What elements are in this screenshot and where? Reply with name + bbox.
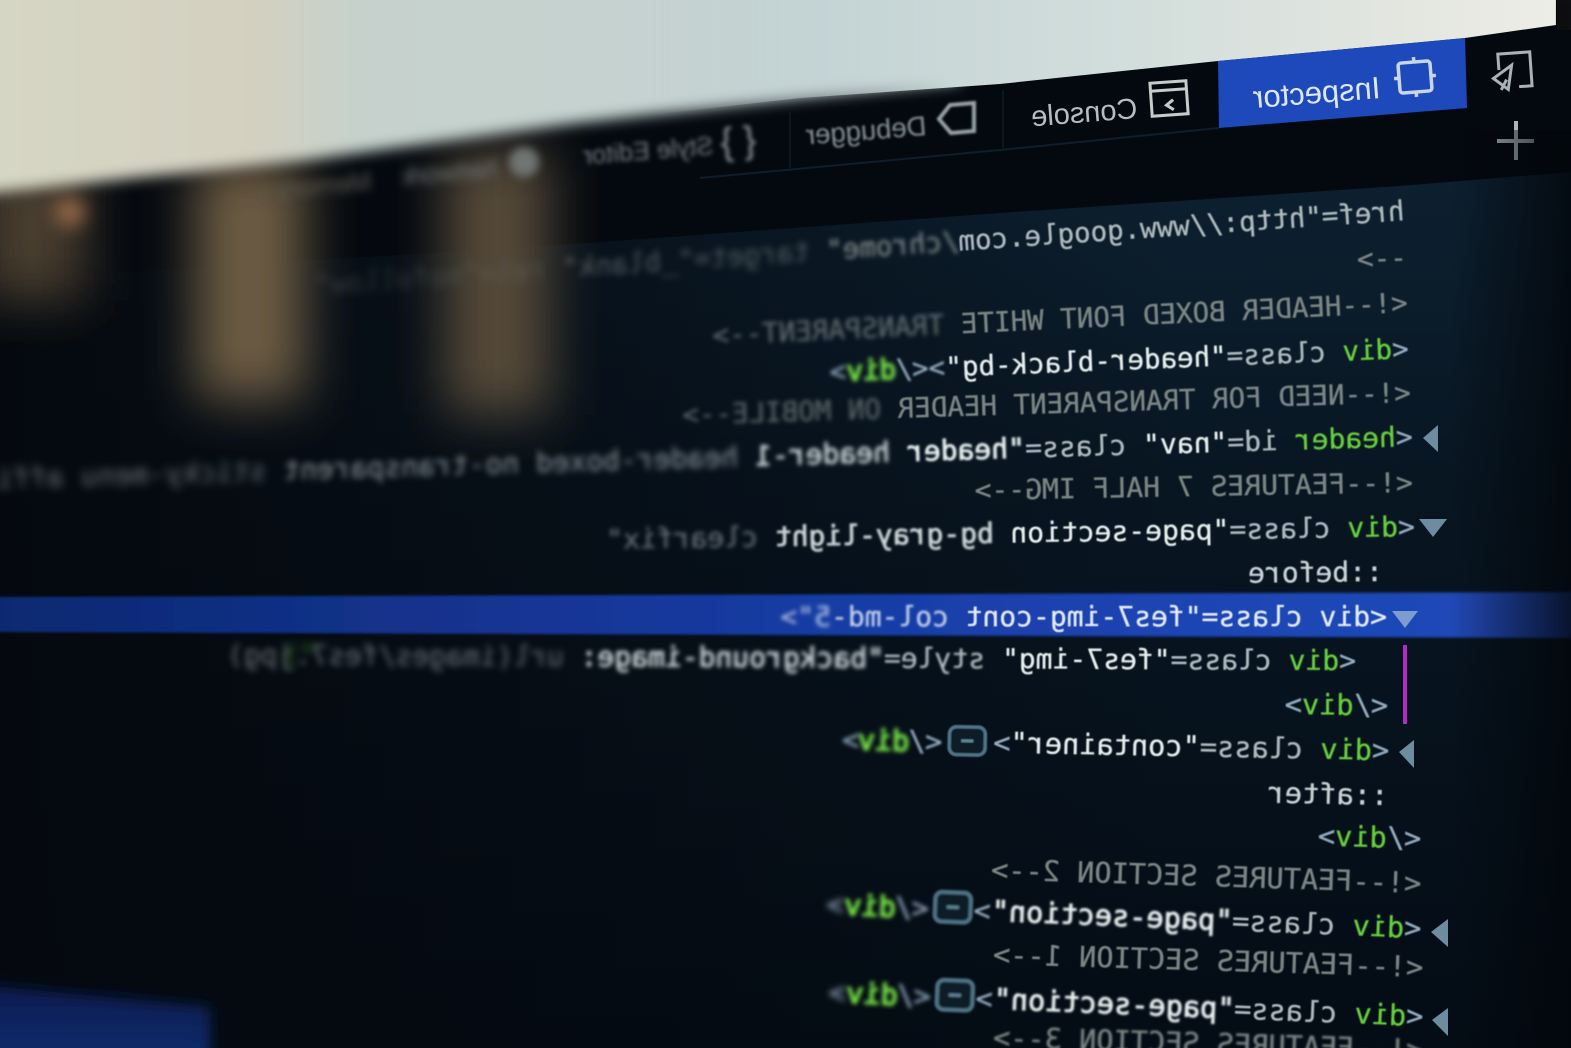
code line: page section 2: <div class= <box>1231 903 1422 945</box>
code line: fes7 img: style= <box>884 642 985 675</box>
code line: page section 2: "page-section" <box>991 894 1233 937</box>
collapse arrow: page section <box>1419 519 1447 537</box>
code line: features 7 comment: <!--FEATURES 7 HALF IMG--> <box>974 466 1413 507</box>
code line: page section 2: div <box>844 888 897 924</box>
icon: plus <box>1497 121 1534 160</box>
tab: Debugger: Debugger <box>805 110 927 150</box>
code line: fes7 img: <div class="fes7-img" <box>1002 642 1356 677</box>
bright wall above the monitor, soft left side <box>0 0 960 196</box>
icon: console window <box>1150 81 1188 116</box>
code line: page section 3: div <box>846 976 899 1012</box>
code line: after pseudo element: ::after <box>1267 775 1389 812</box>
code line: container: <div class="container"> <box>993 725 1390 767</box>
blurred continuation of href: /chrome" <box>825 225 960 266</box>
code line: page section 3: <div class= <box>1233 991 1424 1033</box>
code line: header nav: header-1 <box>755 436 890 473</box>
icon: collapsed content <box>949 727 986 755</box>
code line: fes7 img: "background-image: <box>581 640 884 675</box>
label: Inspector: Inspector <box>1252 70 1382 115</box>
code line: page section gray: clearfix" <box>606 520 758 556</box>
code line: page section 3: > <box>828 975 847 1010</box>
tab: Style Editor: Style Editor <box>582 132 714 170</box>
code line: selected fes7 img cont: <div class="fes7-img-cont <box>966 600 1387 633</box>
code line: fes7 img: ") <box>282 638 316 672</box>
code line: header comment <box>712 287 1408 352</box>
code line: features section 1 comment: <!--FEATURES SECTION 1--> <box>993 937 1424 984</box>
code line: header nav: <header id="nav" class= <box>1025 420 1413 465</box>
code line: closing div 2: </div> <box>1318 819 1422 855</box>
collapse arrow: selected row <box>1392 611 1418 628</box>
icon: collapsed content 3 <box>936 979 973 1011</box>
code line: comment close: --> <box>1356 242 1407 276</box>
code line: header black bg: > <box>829 356 847 388</box>
icon: debugger tag <box>939 103 974 133</box>
code line: page section 3: > <box>975 981 993 1016</box>
code line: selected fes7 img cont <box>780 600 1387 633</box>
icon: braces: { } <box>719 119 758 164</box>
code line: page section 2: > <box>826 887 845 922</box>
code line: selected fes7 img cont: col-md- <box>831 600 949 633</box>
code line: header comment: TRANSPARENT--> <box>712 309 945 352</box>
tab: Network: Memory › <box>261 166 373 206</box>
code line: header nav <box>0 420 1413 506</box>
tab: Style Editor <box>582 119 758 170</box>
code line: header black bg: ></ <box>895 352 946 386</box>
blurred blue block, bottom left <box>0 985 210 1048</box>
tab: Performance: Network <box>400 153 499 191</box>
code line: page section 2: </ <box>894 890 929 925</box>
code line: href: href="http://www.google.com <box>957 195 1405 257</box>
code line: container: </ <box>908 724 943 758</box>
code line: need for transparent comment: ON MOBILE--> <box>682 393 881 431</box>
expand arrow: page section 3 <box>1432 1008 1448 1036</box>
code line: page section 2: > <box>973 893 991 928</box>
code line: href: target="_blank" <box>561 236 811 285</box>
code line: header black bg: <div class="header-black-bg" <box>945 333 1409 384</box>
tab dividers <box>700 90 1219 178</box>
code line: features section 2 comment: <!--FEATURES SECTION 2--> <box>991 852 1422 900</box>
code line: page section 3 <box>828 975 1424 1033</box>
icon: inspector frame <box>1392 55 1438 99</box>
code line: fes7 img: url(images/fes7.jpg) <box>227 638 564 673</box>
code line: header nav: header-boxed no-transparent <box>283 440 739 487</box>
code line: header comment: <!--HEADER BOXED FONT WHITE <box>960 287 1408 340</box>
code line: page section gray <box>606 510 1415 556</box>
tab: Console <box>1030 81 1188 133</box>
dark right monitor edge <box>1557 0 1571 30</box>
expand arrow: page section 2 <box>1431 919 1448 947</box>
code line: header black bg: div <box>846 354 897 388</box>
tab: Debugger <box>805 103 974 150</box>
code line: page section 3: "page-section" <box>993 982 1235 1025</box>
code line: page section 2 <box>826 887 1422 945</box>
selection marker: magenta bar <box>1403 645 1407 724</box>
code line: closing div: </div> <box>1285 687 1388 722</box>
code line: need for transparent comment <box>682 377 1411 431</box>
right edge vignette <box>1450 130 1571 1048</box>
tab: Performance <box>400 147 539 191</box>
icon: gauge <box>509 147 539 177</box>
bright wall above the monitor, sharp right side <box>640 0 1556 116</box>
blurred reflections: warm lights <box>0 150 550 415</box>
code line: before pseudo element: ::before <box>1248 555 1383 589</box>
code line: container <box>842 722 1390 767</box>
icon: collapsed content 2 <box>934 891 971 923</box>
code line: page section 3: </ <box>896 978 931 1013</box>
code line: header nav: "header <box>906 432 1025 468</box>
code line: need for transparent comment: <!--NEED FOR TRANSPARENT HEADER <box>897 377 1411 425</box>
tab: Console: Console <box>1030 93 1139 133</box>
code line: page section gray: <div class="page-section <box>1010 510 1415 549</box>
code line: page section gray: bg-gray-light <box>775 517 994 553</box>
code line: href <box>313 195 1406 302</box>
selected row highlight <box>0 592 1571 638</box>
code line: container: div <box>857 723 910 758</box>
code line: fes7 img <box>227 638 1356 677</box>
code line: selected fes7 img cont: 5"> <box>780 600 831 633</box>
icon: responsive view <box>1492 52 1532 90</box>
expand arrow: container <box>1399 740 1414 768</box>
code line: container: > <box>842 722 860 757</box>
tab: Inspector selected <box>1218 38 1467 128</box>
expand arrow: header <box>1423 425 1438 452</box>
code line: href: rel="nofollow" <box>313 254 546 301</box>
